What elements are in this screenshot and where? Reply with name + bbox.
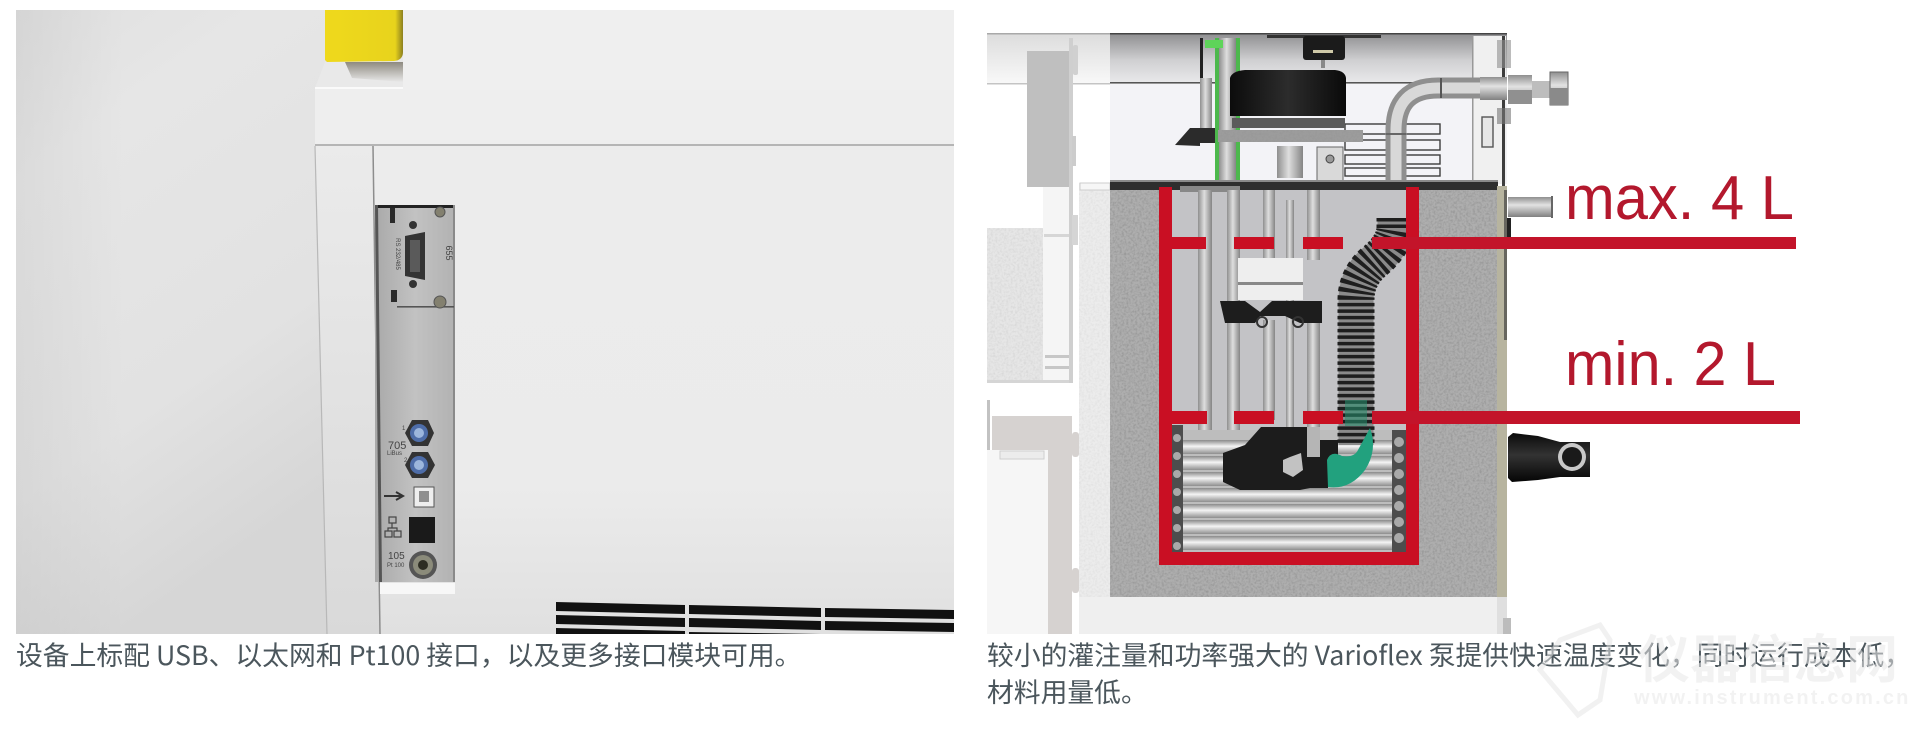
- LiBus connectors: [405, 420, 435, 478]
- interface module: [375, 205, 455, 594]
- motor column and bracket: [1277, 146, 1343, 183]
- outer wall: [1497, 186, 1511, 597]
- red tank outline: [1159, 187, 1419, 565]
- cooling slats: [1345, 124, 1440, 176]
- green hose overlay: [1345, 400, 1367, 426]
- impeller cylinder and bracket: [1220, 258, 1322, 327]
- tank interior: [1172, 190, 1406, 552]
- module labels: 2: [404, 458, 408, 464]
- Pt100 connector: [409, 551, 437, 579]
- black motor drum: [1230, 70, 1346, 116]
- module labels: Pt 100: [387, 563, 405, 569]
- caption left: 设备上标配 USB、以太网和 Pt100 接口，以及更多接口模块可用。: [16, 634, 801, 673]
- ethernet port: [385, 517, 435, 543]
- motor plate: [1218, 118, 1363, 142]
- module slots and seam: [390, 208, 454, 308]
- RS232 connector: [405, 221, 425, 288]
- wall background: [16, 10, 328, 634]
- screws: [434, 207, 446, 308]
- lower faded strip: [1079, 597, 1511, 634]
- outlet pipe: [1386, 78, 1482, 218]
- left sensor probe: [1175, 38, 1217, 146]
- watermark name: 仪器信息网: [1638, 618, 1898, 693]
- top sensor mount: [1267, 35, 1381, 68]
- USB port: [384, 487, 434, 507]
- module labels: [387, 238, 454, 569]
- min level line: [1172, 411, 1800, 424]
- module labels: 705: [388, 440, 406, 452]
- pipe fitting: [1480, 72, 1568, 105]
- max level line: [1172, 237, 1796, 249]
- yellow handle: [325, 10, 403, 62]
- module labels: 1: [402, 426, 406, 432]
- caption right: 较小的灌注量和功率强大的 Varioflex 泵提供快速温度变化，同时运行成本低，: [987, 634, 1911, 673]
- vent slots: [556, 602, 954, 634]
- label: max volume: max. 4 L: [1565, 164, 1794, 233]
- black pump housing: [1223, 427, 1338, 490]
- cabinet side strip: [315, 146, 380, 634]
- module labels: LiBus: [387, 451, 402, 457]
- insulation block: [1110, 186, 1498, 597]
- module labels: RS 232/485: [394, 238, 400, 271]
- vertical tubes: [1198, 190, 1320, 440]
- side stub pipe: [1508, 196, 1553, 218]
- watermark: [1540, 618, 1911, 715]
- black drain knob: [1508, 433, 1590, 482]
- corrugated Varioflex hose: [1356, 218, 1395, 445]
- green shaft: [1205, 38, 1240, 184]
- right diagram: filling volume cutaway: [987, 33, 1800, 634]
- lid: [1110, 180, 1498, 192]
- lower coil: [1172, 425, 1406, 552]
- watermark logo: [1540, 625, 1610, 715]
- ghosted left structure: [987, 33, 1110, 634]
- caption right: [987, 634, 1911, 710]
- green pump elbow: [1327, 428, 1373, 487]
- main door panel: [374, 146, 954, 634]
- left photo: instrument rear panel: [16, 10, 954, 634]
- caption right: 材料用量低。: [987, 671, 1148, 710]
- upper cabinet cover: [315, 10, 954, 146]
- label: min volume: min. 2 L: [1565, 330, 1776, 399]
- module labels: 655: [444, 245, 454, 261]
- watermark url: www.instrument.com.cn: [1633, 687, 1911, 709]
- upper housing: [1110, 33, 1511, 191]
- module labels: 105: [388, 551, 405, 562]
